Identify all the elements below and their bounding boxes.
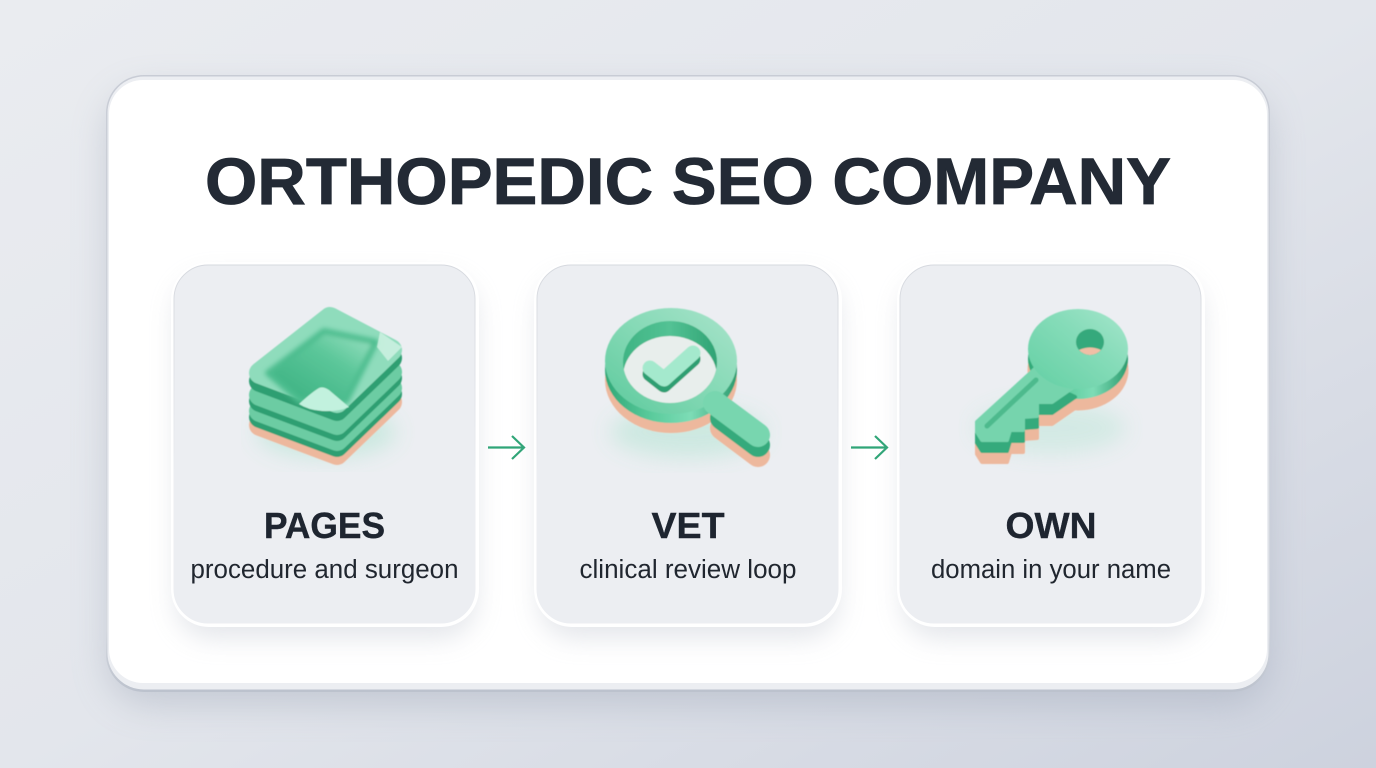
panel: pages — [171, 262, 479, 638]
lens wall — [623, 321, 717, 403]
icon: magnifier with check — [605, 308, 766, 458]
caption: vet: clinical review loop — [580, 556, 796, 584]
icon: key — [974, 309, 1128, 462]
label: own: OWN — [1006, 505, 1096, 546]
peach base — [977, 330, 1128, 462]
main panel — [106, 75, 1270, 704]
panel: own — [897, 262, 1205, 638]
label: pages: PAGES — [264, 505, 385, 546]
key slot — [987, 380, 1036, 426]
layer 1 — [260, 326, 391, 410]
top face — [977, 368, 1075, 440]
caption: own: domain in your name — [931, 556, 1171, 584]
arrow 1 — [488, 436, 524, 459]
green side — [722, 418, 758, 445]
inner pane — [268, 331, 376, 401]
caption: pages: procedure and surgeon — [190, 556, 458, 584]
lens floor — [623, 335, 717, 404]
title: ORTHOPEDIC SEO COMPANY — [205, 144, 1171, 218]
peach base — [260, 370, 391, 454]
check mark — [650, 359, 693, 385]
layer 2 — [260, 346, 391, 430]
ring top face — [605, 308, 737, 414]
layer 3 — [260, 362, 391, 446]
panel: vet — [534, 262, 842, 638]
corner highlight — [377, 332, 402, 361]
folded flap — [299, 387, 349, 411]
label: vet: VET — [652, 505, 725, 546]
handle top face — [715, 403, 758, 435]
key hole — [1076, 329, 1104, 355]
arrow 2 — [851, 436, 887, 459]
icon: stacked pages — [256, 318, 402, 458]
green side — [977, 319, 1128, 451]
peach base — [722, 428, 758, 455]
